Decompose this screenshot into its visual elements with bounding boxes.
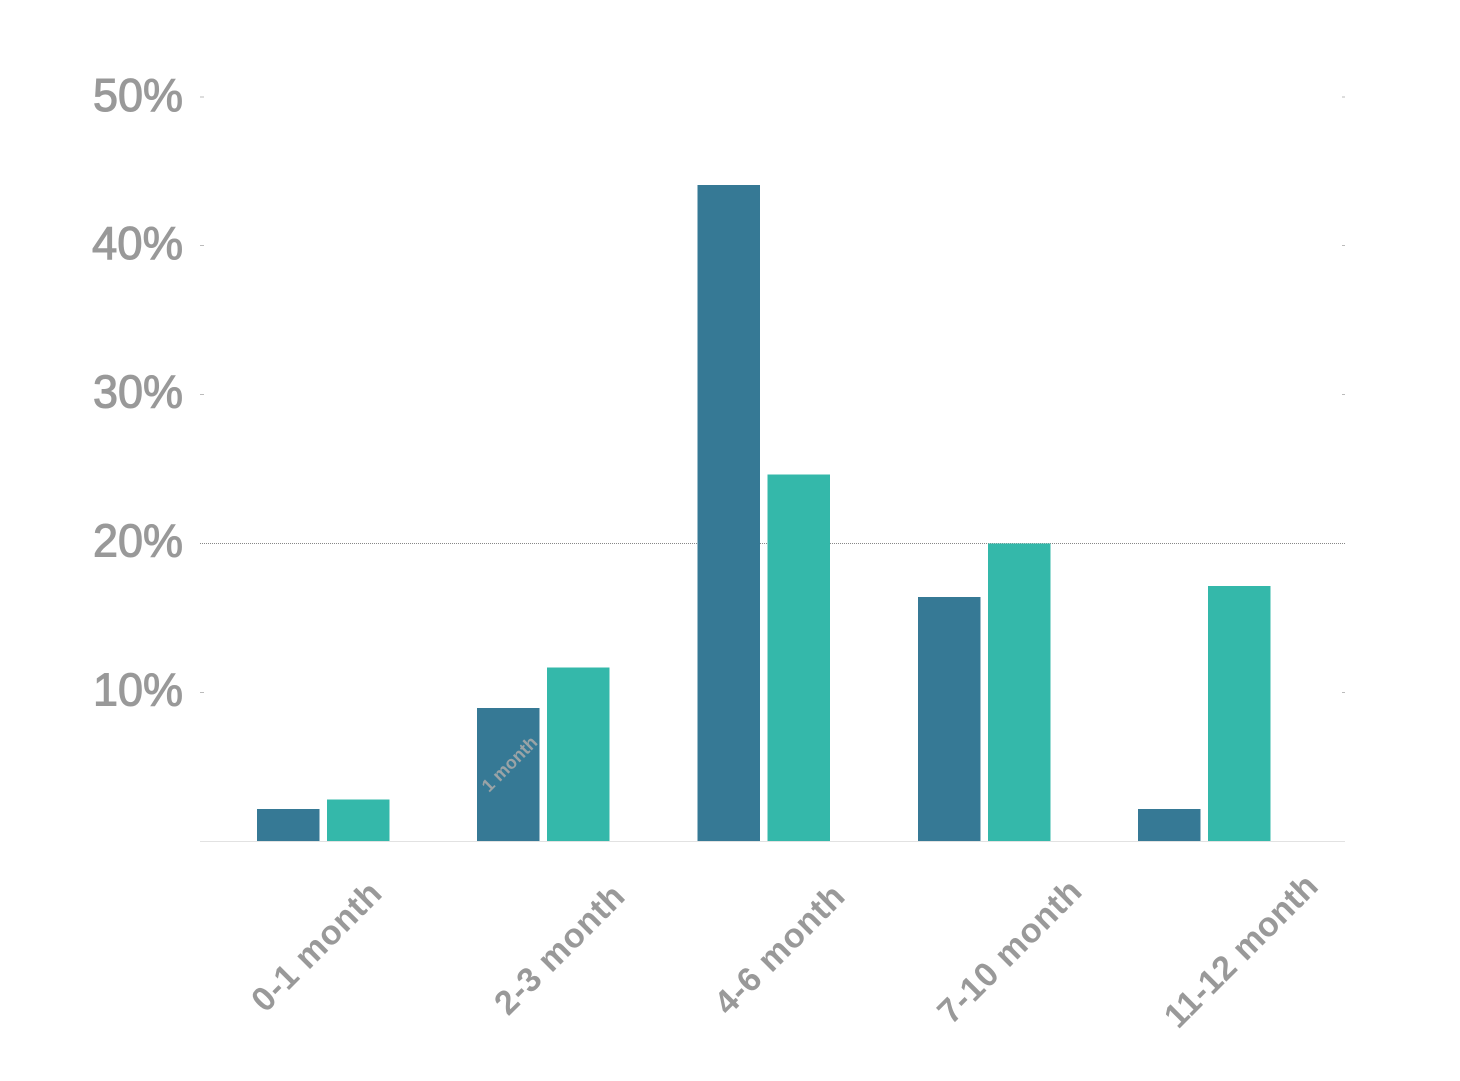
y-axis labels <box>92 69 183 716</box>
y-axis labels: 20% <box>93 514 183 566</box>
in-bar label: 1 month <box>478 732 541 796</box>
y-axis labels: 40% <box>92 217 183 269</box>
x-axis labels <box>244 867 1326 1035</box>
x-axis labels: 7-10 month <box>930 872 1090 1031</box>
y-axis labels: 30% <box>93 366 183 418</box>
y-axis labels: 10% <box>93 664 183 716</box>
x-axis labels: 11-12 month <box>1157 867 1326 1035</box>
y-axis labels: 50% <box>93 69 183 121</box>
bars: second series <box>327 474 1270 841</box>
x-axis labels: 4-6 month <box>707 877 853 1022</box>
x-axis labels: 2-3 month <box>487 877 633 1022</box>
x-axis labels: 0-1 month <box>244 874 390 1019</box>
bars: first series <box>257 185 1200 841</box>
